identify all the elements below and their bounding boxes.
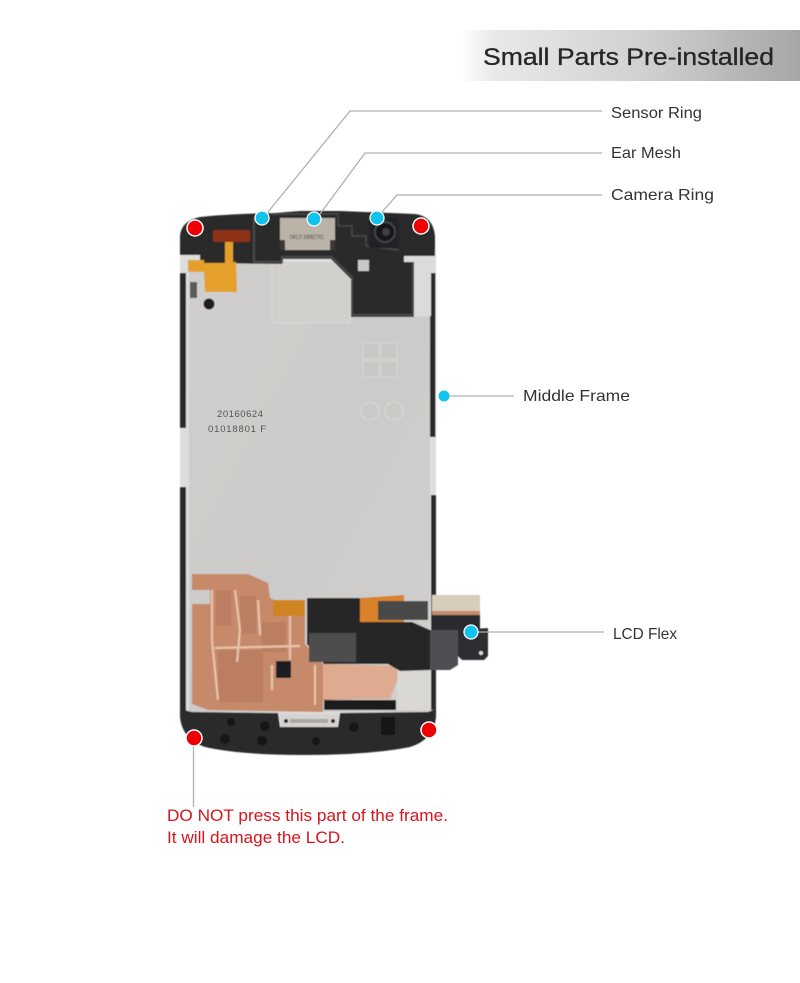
heading banner: Small Parts Pre-installed <box>483 44 774 71</box>
blue marker: middle frame <box>438 390 450 402</box>
copper shading <box>216 590 286 702</box>
copper cutout <box>276 661 291 678</box>
bottom black frame <box>180 709 436 755</box>
black connector strip <box>324 700 396 710</box>
serial number text: 20160624 <box>217 409 263 420</box>
right frame strips <box>430 273 436 710</box>
top left flex cable <box>188 230 250 298</box>
label: sensor ring: Sensor Ring <box>611 105 702 122</box>
side frame <box>180 250 436 720</box>
red marker: bottom right <box>421 722 437 738</box>
plate stamped grid <box>363 343 397 377</box>
earpiece mesh module <box>280 218 335 250</box>
label: ear mesh: Ear Mesh <box>611 145 681 162</box>
warning text: It will damage the LCD. <box>167 829 345 847</box>
warning text: DO NOT press this part of the frame. <box>167 807 448 825</box>
bottom connector bracket <box>280 714 338 727</box>
copper lower pad <box>323 664 397 699</box>
callout line: camera ring <box>382 195 602 212</box>
label: middle frame: Middle Frame <box>523 388 630 405</box>
serial number text: 01018801 F <box>208 424 266 435</box>
blue marker: sensor ring <box>255 211 269 225</box>
label: camera ring: Camera Ring <box>611 187 714 204</box>
stepped lip around earpiece <box>270 214 399 250</box>
flex grey patch <box>309 633 356 662</box>
sticker <box>358 260 369 271</box>
silver lower corner <box>397 670 430 710</box>
plate hole <box>204 298 214 310</box>
blue marker: LCD flex <box>464 625 478 639</box>
warning text <box>167 807 448 847</box>
callout line: middle frame <box>446 395 514 397</box>
callout line: ear mesh <box>320 153 602 214</box>
copper highlights <box>212 590 315 705</box>
black display flex <box>307 598 432 671</box>
blue marker: camera ring <box>370 211 384 225</box>
plate raised panel <box>272 264 350 323</box>
callout line: LCD flex <box>474 631 604 633</box>
callout line: warning <box>192 745 194 807</box>
plate stamped circles <box>361 402 403 420</box>
phone LCD assembly <box>180 211 488 755</box>
small orange connector <box>273 600 305 616</box>
serial number text <box>208 409 266 435</box>
blue marker: ear mesh <box>307 212 321 226</box>
connector patch <box>378 601 428 620</box>
bottom frame details <box>220 717 395 746</box>
external LCD flex <box>430 595 488 670</box>
camera <box>369 218 399 248</box>
metal plate <box>189 262 430 712</box>
top black frame <box>180 211 435 317</box>
red marker: top left <box>187 220 203 236</box>
red marker: top right <box>413 218 429 234</box>
silver corner bracket <box>404 257 431 317</box>
frame inner lip <box>254 218 413 315</box>
red marker: bottom left <box>186 730 202 746</box>
left frame strips <box>180 273 186 712</box>
heading banner <box>460 30 800 81</box>
copper shield <box>192 574 397 712</box>
label: LCD flex: LCD Flex <box>613 626 677 643</box>
small orange flex <box>360 595 404 622</box>
earpiece mesh module: 041.0 16062761 <box>290 234 324 241</box>
callout line: sensor ring <box>268 111 602 212</box>
